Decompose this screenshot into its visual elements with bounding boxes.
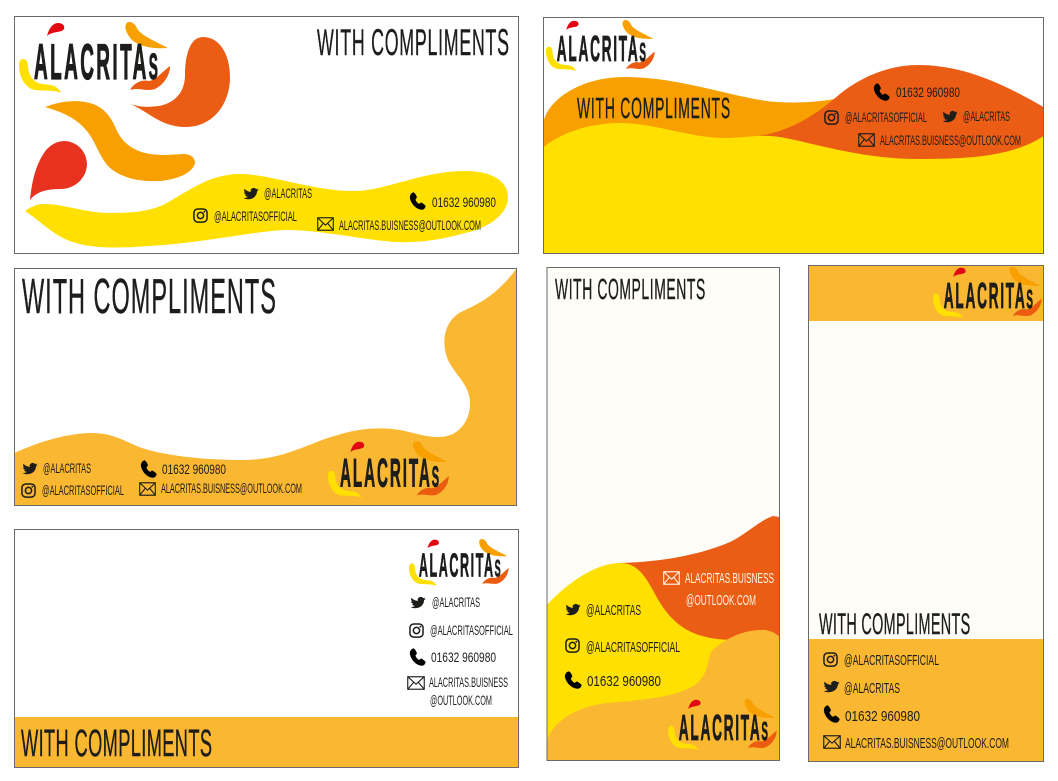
heading: WITH COMPLIMENTS	[819, 607, 970, 640]
contact: phone	[410, 649, 496, 665]
contact: phone: 01632 960980	[845, 708, 920, 725]
heading: WITH COMPLIMENTS	[317, 23, 509, 64]
contact: phone	[141, 461, 226, 477]
orange blob	[128, 37, 230, 127]
contact: phone: 01632 960980	[162, 461, 226, 477]
contact: email	[318, 217, 481, 233]
yellow blob	[547, 563, 735, 745]
heading: WITH COMPLIMENTS	[22, 270, 276, 324]
contact: instagram: @ALACRITASOFFICIAL	[214, 208, 297, 224]
contact: instagram	[825, 109, 927, 125]
amber wave blob	[45, 101, 195, 181]
contact: twitter: @ALACRITAS	[264, 185, 312, 201]
panel: landscape slip with scattered blobs	[14, 16, 518, 254]
heading: WITH COMPLIMENTS	[21, 723, 212, 765]
contact: twitter: @ALACRITAS	[963, 108, 1010, 124]
logo: ALACRITAS	[419, 548, 501, 585]
panel: landscape slip with wave bands	[544, 18, 1044, 254]
contact: twitter	[411, 594, 480, 610]
orange wave	[753, 65, 1044, 170]
logo	[328, 441, 449, 498]
panel: portrait slip with header and footer bands	[808, 266, 1044, 762]
contact: twitter: @ALACRITAS	[432, 594, 480, 610]
panel: landscape slip with bottom band	[14, 530, 518, 768]
logo	[19, 22, 170, 93]
contact: twitter	[566, 602, 641, 619]
gold footer band	[808, 639, 1044, 762]
heading: WITH COMPLIMENTS	[577, 91, 730, 124]
logo: ALACRITAS	[34, 35, 158, 91]
gold curved shape	[14, 268, 516, 506]
orange blob	[620, 516, 780, 660]
contact: instagram: @ALACRITASOFFICIAL	[586, 639, 680, 656]
contact: phone	[410, 193, 496, 210]
contact: twitter	[244, 185, 312, 201]
amber wave	[544, 77, 840, 160]
logo: ALACRITAS	[679, 707, 768, 748]
contact: phone: 01632 960980	[432, 194, 496, 210]
logo: ALACRITAS	[340, 452, 439, 496]
panel: portrait slip with layered blobs	[547, 268, 780, 760]
contact: instagram	[566, 639, 680, 656]
contact: email: ALACRITAS.BUISNESS	[429, 674, 508, 690]
contact: phone: 01632 960980	[431, 649, 496, 665]
yellow contact band	[25, 171, 508, 248]
logo: ALACRITAS	[557, 28, 646, 69]
contact: email: ALACRITAS.BUISNESS@OUTLOOK.COM	[339, 217, 481, 233]
contact: instagram	[824, 652, 939, 669]
contact: email: ALACRITAS.BUISNESS@OUTLOOK.COM	[161, 480, 302, 496]
contact: phone	[874, 84, 960, 100]
contact: twitter	[824, 680, 900, 697]
contact: instagram	[22, 482, 124, 498]
logo	[546, 20, 655, 71]
contact: email	[664, 570, 774, 609]
contact: instagram	[410, 622, 513, 638]
contact: instagram: @ALACRITASOFFICIAL	[845, 109, 927, 125]
red drop blob	[30, 141, 87, 200]
contact: instagram: @ALACRITASOFFICIAL	[42, 482, 124, 498]
contact: phone	[824, 706, 920, 725]
contact: email: @OUTLOOK.COM	[430, 692, 492, 708]
contact: twitter	[943, 108, 1010, 124]
contact: twitter: @ALACRITAS	[586, 602, 641, 619]
logo	[409, 539, 509, 586]
contact: twitter: @ALACRITAS	[844, 680, 900, 697]
contact: instagram	[194, 208, 297, 224]
contact: phone: 01632 960980	[587, 673, 661, 690]
contact: twitter	[23, 460, 91, 476]
logo: ALACRITAS	[944, 275, 1033, 316]
contact: instagram: @ALACRITASOFFICIAL	[844, 652, 939, 669]
contact: email	[408, 674, 508, 708]
logo	[933, 267, 1042, 318]
contact: email: ALACRITAS.BUISNESS	[685, 570, 774, 587]
contact: phone: 01632 960980	[896, 84, 960, 100]
contact: twitter: @ALACRITAS	[43, 460, 91, 476]
contact: instagram: @ALACRITASOFFICIAL	[430, 622, 513, 638]
heading: WITH COMPLIMENTS	[555, 272, 705, 305]
contact: email: @OUTLOOK.COM	[686, 592, 756, 609]
gold footer band	[14, 717, 518, 768]
logo	[668, 699, 777, 750]
gold header band	[808, 266, 1044, 321]
contact: phone	[565, 672, 661, 690]
gold blob	[547, 630, 780, 760]
contact: email	[140, 480, 302, 496]
yellow wave	[544, 123, 1044, 254]
panel: landscape slip with gold corner	[14, 268, 516, 506]
